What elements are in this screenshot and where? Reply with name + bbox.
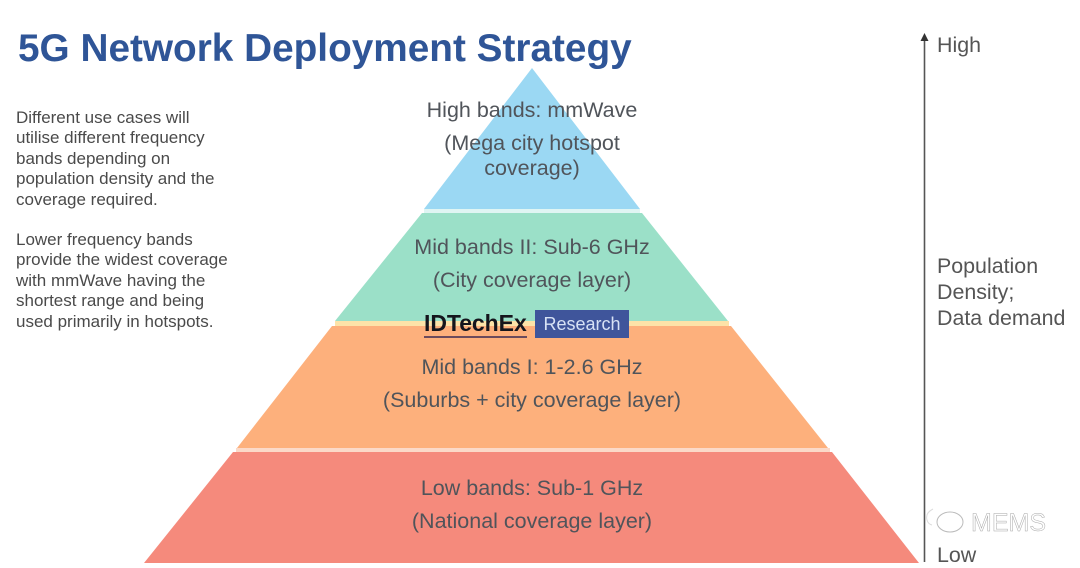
label: national coverage: (National coverage layer)	[412, 509, 652, 533]
arrow: density axis	[920, 33, 928, 562]
text block: frequency bands: provide the widest coverage	[16, 250, 228, 269]
label: mid bands II: Mid bands II: Sub-6 GHz	[414, 235, 650, 259]
axis label: low: Low	[937, 543, 976, 567]
divider: mid I and low	[236, 448, 830, 452]
axis label: population density: Density;	[937, 280, 1014, 304]
text block: use cases: population density and the	[16, 169, 214, 188]
logo badge	[535, 310, 629, 338]
axis label: population density: Population	[937, 254, 1038, 278]
title: 5G Network Deployment Strategy	[18, 27, 632, 70]
axis label: population density: Data demand	[937, 306, 1065, 330]
divider: mid II and mid I	[335, 321, 729, 326]
label: suburbs and city: (Suburbs + city coverage layer)	[383, 388, 681, 412]
icon: chat bubbles	[926, 508, 964, 532]
axis label: high: High	[937, 33, 981, 57]
text block: use cases: coverage required.	[16, 190, 158, 209]
label: city coverage: (City coverage layer)	[433, 268, 631, 292]
divider: high and mid II	[424, 209, 640, 213]
text block: frequency bands: used primarily in hotspots.	[16, 312, 213, 331]
logo wordmark: IDTechEx	[424, 310, 527, 336]
layer: low bands	[144, 452, 919, 563]
axis label: population density	[937, 254, 1065, 330]
text block: frequency bands: Lower frequency bands	[16, 230, 193, 249]
layer: mid bands I	[237, 326, 828, 448]
text block: frequency bands: shortest range and being	[16, 291, 204, 310]
label: mega city hotspot	[444, 131, 620, 180]
logo badge: Research	[543, 314, 621, 334]
watermark text: MEMS	[971, 509, 1046, 537]
layer: mid bands II	[335, 213, 728, 321]
watermark: MEMS	[926, 508, 1046, 537]
label: mega city hotspot: (Mega city hotspot	[444, 131, 620, 155]
label: mega city hotspot: coverage)	[484, 156, 580, 180]
text block: frequency bands	[16, 230, 228, 331]
text block: use cases: Different use cases will	[16, 108, 190, 127]
text block: use cases: utilise different frequency	[16, 128, 205, 147]
text block: use cases: bands depending on	[16, 149, 170, 168]
text block: frequency bands: with mmWave having the	[16, 271, 205, 290]
label: high bands: High bands: mmWave	[427, 98, 637, 122]
label: low bands: Low bands: Sub-1 GHz	[421, 476, 643, 500]
logo: IDTechEx Research	[424, 310, 629, 338]
layer: high bands	[424, 68, 640, 209]
label: mid bands I: Mid bands I: 1-2.6 GHz	[421, 355, 643, 379]
text block: use cases	[16, 108, 214, 209]
